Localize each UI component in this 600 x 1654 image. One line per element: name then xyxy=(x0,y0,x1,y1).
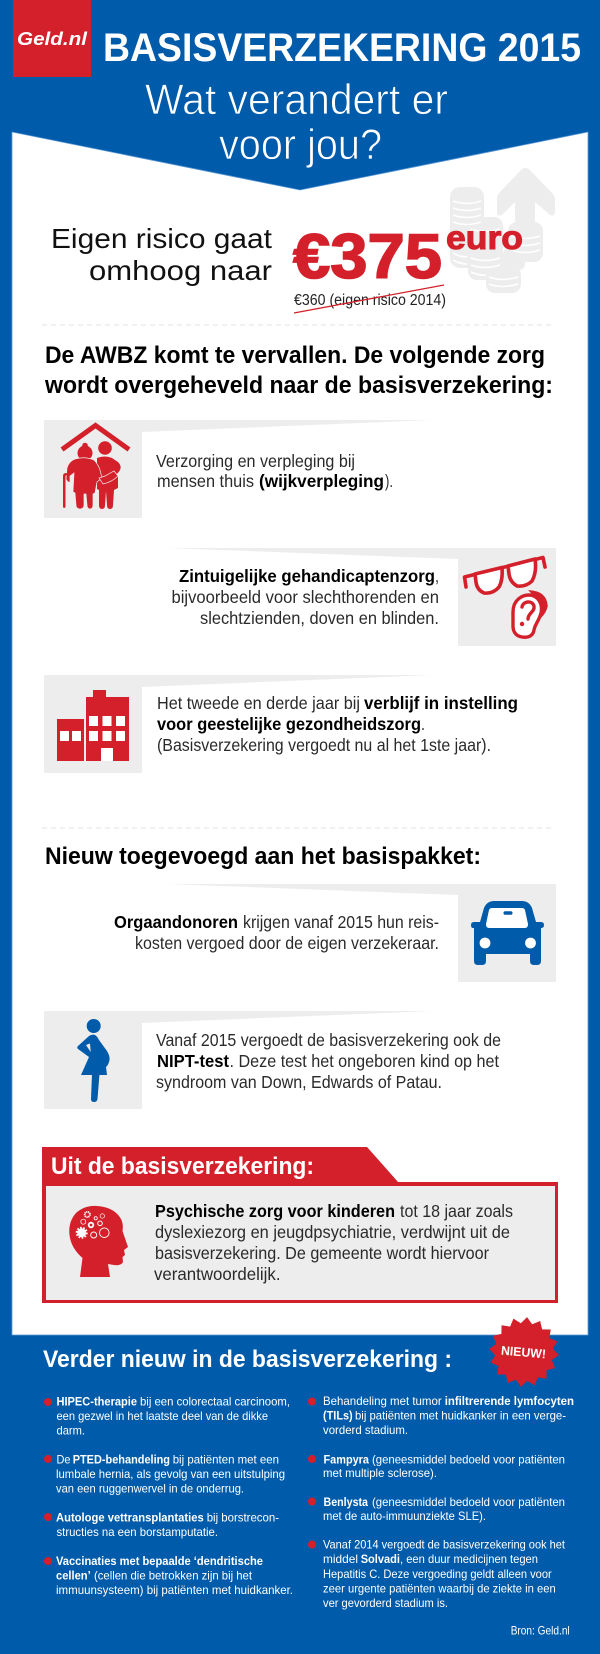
bullet: PTED-behandeling: PTED-behandeling xyxy=(73,1452,170,1466)
panel: wijkverpleging xyxy=(44,420,432,518)
list: right column xyxy=(308,1394,574,1610)
bullet: Solvadi: middel xyxy=(323,1552,358,1566)
bullet: Benlysta: (geneesmiddel bedoeld voor patiënten xyxy=(372,1495,565,1509)
bullet: Solvadi xyxy=(308,1538,566,1610)
icon: pregnant woman xyxy=(77,1019,110,1102)
bullet: Solvadi: Solvadi xyxy=(361,1552,400,1566)
bullet: lymfocyten: vorderd stadium. xyxy=(323,1423,408,1437)
text: instelling: verblijf in instelling xyxy=(364,693,518,713)
subtitle: voor jou? xyxy=(219,121,382,169)
text: eigen risico: omhoog naar xyxy=(89,255,272,286)
text: psychische zorg: dyslexiezorg en jeugdpsychiatrie, verdwijnt uit de xyxy=(155,1222,510,1242)
icon: coins and up arrow xyxy=(450,168,555,293)
panel: zintuigelijke zorg xyxy=(168,548,556,646)
text: instelling: . xyxy=(421,714,425,734)
text: wijkverpleging: ). xyxy=(385,471,393,491)
bullet: autologe vettransplantaties: structies na een borstamputatie. xyxy=(56,1525,218,1539)
bullet: HIPEC-therapie: darm. xyxy=(56,1424,85,1438)
heading: nieuw toegevoegd: Nieuw toegevoegd aan het basispakket: xyxy=(45,843,481,870)
text: wijkverpleging: (wijkverpleging xyxy=(259,471,384,491)
panel: NIPT-test xyxy=(44,1011,501,1109)
text: orgaandonoren: kosten vergoed door de eigen verzekeraar. xyxy=(135,933,439,953)
subtitle xyxy=(145,76,448,169)
bullet: vaccinaties: immuunsysteem) bij patiënten met huidkanker. xyxy=(56,1583,293,1597)
text: NIPT-test: NIPT-test xyxy=(157,1051,229,1071)
text: zintuigelijke zorg: bijvoorbeeld voor slechthorenden en xyxy=(172,587,439,607)
text: instelling: (Basisverzekering vergoedt nu al het 1ste jaar). xyxy=(157,735,491,755)
bullet: Solvadi: , een duur medicijnen tegen xyxy=(400,1552,538,1566)
bullet: lymfocyten: Behandeling met tumor xyxy=(323,1394,442,1408)
bullet: lymfocyten xyxy=(308,1394,574,1437)
icon: elderly couple under roof xyxy=(62,426,129,509)
heading: AWBZ xyxy=(44,342,553,399)
text: wijkverpleging xyxy=(156,451,393,491)
amount: 375 euro: €375 xyxy=(293,222,442,292)
text: wijkverpleging: Verzorging en verpleging bij xyxy=(156,451,355,471)
text: instelling xyxy=(157,693,518,755)
bullet: PTED-behandeling: lumbale hernia, als gevolg van een uitstulping xyxy=(56,1467,285,1481)
text: wijkverpleging: mensen thuis xyxy=(157,471,254,491)
text: zintuigelijke zorg xyxy=(172,566,439,628)
icon: car xyxy=(471,901,544,965)
text: orgaandonoren: krijgen vanaf 2015 hun reis- xyxy=(243,912,439,932)
heading: verder nieuw: Verder nieuw in de basisverzekering : xyxy=(43,1346,452,1373)
bullet: lymfocyten: bij patiënten met huidkanker in een verge- xyxy=(355,1408,566,1422)
source credit: Bron: Geld.nl xyxy=(511,1624,570,1638)
title: BASISVERZEKERING 2015 xyxy=(103,26,581,70)
bullet: Fampyra: Fampyra xyxy=(324,1452,369,1466)
text: zintuigelijke zorg: , xyxy=(435,566,439,586)
text: instelling: Het tweede en derde jaar bij xyxy=(157,693,360,713)
bullet: lymfocyten: (TILs) xyxy=(323,1408,353,1422)
text: eigen risico: Eigen risico gaat xyxy=(51,223,272,254)
old amount struck through xyxy=(294,285,446,313)
bullet: HIPEC-therapie xyxy=(44,1394,290,1438)
text: psychische zorg xyxy=(154,1201,513,1284)
bullet: lymfocyten: infiltrerende lymfocyten xyxy=(445,1394,574,1408)
bullet: Solvadi: zeer urgente patiënten waarbij de ziekte in een xyxy=(323,1582,556,1596)
logo: Geld.nl: Geld.nl xyxy=(17,28,88,49)
bullet: vaccinaties: (cellen die betrokken zijn bij het xyxy=(94,1568,253,1582)
text: zintuigelijke zorg: Zintuigelijke gehandicaptenzorg xyxy=(179,566,435,586)
text: instelling: voor geestelijke gezondheidszorg xyxy=(157,714,421,734)
bullet: Solvadi: Vanaf 2014 vergoedt de basisverzekering ook het xyxy=(323,1538,566,1552)
bullet: autologe vettransplantaties: Autologe vettransplantaties xyxy=(56,1510,204,1524)
text: orgaandonoren: Orgaandonoren xyxy=(114,912,238,932)
text: NIPT-test: syndroom van Down, Edwards of Patau. xyxy=(156,1072,442,1092)
bullet: autologe vettransplantaties xyxy=(44,1510,279,1539)
text: zintuigelijke zorg: slechtzienden, doven en blinden. xyxy=(200,608,439,628)
bullet: vaccinaties: Vaccinaties met bepaalde ‘dendritische xyxy=(56,1554,263,1568)
bullet: Fampyra: (geneesmiddel bedoeld voor patiënten xyxy=(372,1452,565,1466)
text: NIPT-test: . Deze test het ongeboren kind op het xyxy=(230,1051,499,1071)
text: orgaandonoren xyxy=(114,912,439,953)
icon: head with gears xyxy=(69,1206,128,1277)
panel: orgaandonoren xyxy=(114,884,556,982)
badge: nieuw xyxy=(486,1314,562,1390)
text: NIPT-test: Vanaf 2015 vergoedt de basisverzekering ook de xyxy=(156,1030,501,1050)
bullet: PTED-behandeling: De xyxy=(56,1452,71,1466)
bullet: HIPEC-therapie: een gezwel in het laatste deel van de dikke xyxy=(56,1409,268,1423)
white content panel xyxy=(12,132,588,1335)
text: psychische zorg: Psychische zorg voor kinderen xyxy=(155,1201,395,1221)
bullet: HIPEC-therapie: bij een colorectaal carcinoom, xyxy=(140,1394,290,1408)
bullet: Benlysta: Benlysta xyxy=(324,1495,368,1509)
heading: AWBZ: De AWBZ komt te vervallen. De volgende zorg xyxy=(45,342,545,369)
bullet: vaccinaties: cellen’ xyxy=(56,1568,91,1582)
bullet: Solvadi: Hepatitis C. Deze vergoeding geldt alleen voor xyxy=(323,1567,552,1581)
badge: nieuw: NIEUW! xyxy=(500,1344,546,1361)
bullet: Fampyra xyxy=(308,1452,565,1480)
old amount struck through: €360 (eigen risico 2014) xyxy=(294,292,446,309)
list: left column xyxy=(44,1394,293,1597)
text: eigen risico xyxy=(51,223,272,286)
subtitle: Wat verandert er xyxy=(145,76,448,124)
bullet: PTED-behandeling xyxy=(44,1452,285,1496)
bullet: vaccinaties xyxy=(44,1554,293,1597)
panel: uit de basisverzekering xyxy=(42,1147,558,1303)
bullet: Solvadi: ver gevorderd stadium is. xyxy=(323,1596,448,1610)
logo: Geld.nl xyxy=(13,0,91,77)
bullet: HIPEC-therapie: HIPEC-therapie xyxy=(56,1394,137,1408)
text: psychische zorg: basisverzekering. De gemeente wordt hiervoor xyxy=(155,1243,489,1263)
heading: uit de basisverzekering: Uit de basisverzekering: xyxy=(51,1153,314,1180)
amount: 375 euro xyxy=(293,219,523,292)
bullet: Fampyra: met multiple sclerose). xyxy=(323,1466,437,1480)
text: psychische zorg: verantwoordelijk. xyxy=(154,1264,280,1284)
panel: geestelijke gezondheidszorg xyxy=(44,675,518,773)
text: psychische zorg: tot 18 jaar zoals xyxy=(400,1201,513,1221)
bullet: Benlysta xyxy=(308,1495,565,1523)
amount: 375 euro: euro xyxy=(446,219,523,256)
text: NIPT-test xyxy=(156,1030,501,1092)
icon: glasses and ear xyxy=(464,558,547,637)
bullet: PTED-behandeling: bij patiënten met een xyxy=(173,1452,279,1466)
bullet: Benlysta: met de auto-immuunziekte SLE). xyxy=(323,1509,486,1523)
bullet: PTED-behandeling: van een ruggenwervel in de onderrug. xyxy=(56,1482,244,1496)
heading: AWBZ: wordt overgeheveld naar de basisverzekering: xyxy=(44,372,553,399)
icon: buildings xyxy=(57,690,129,761)
bullet: autologe vettransplantaties: bij borstrecon- xyxy=(207,1510,279,1524)
